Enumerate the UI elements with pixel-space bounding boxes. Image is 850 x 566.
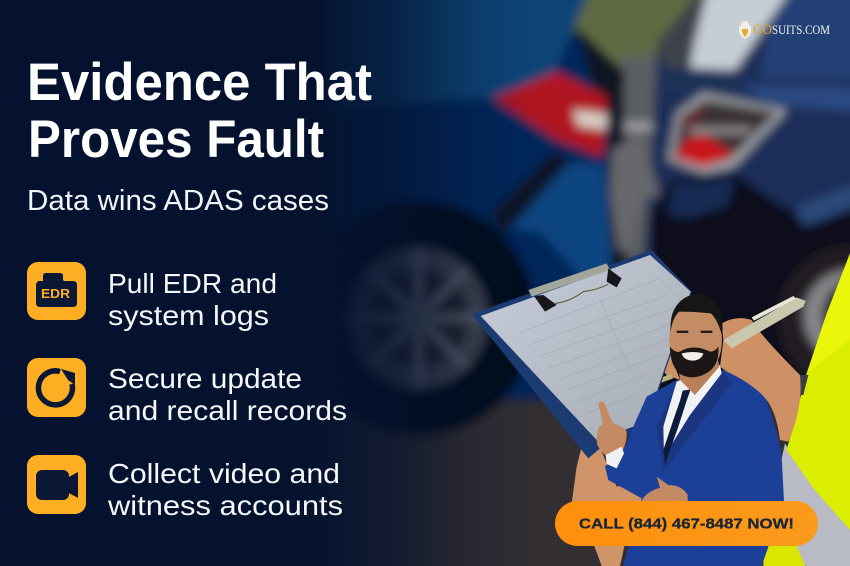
road between the cars: [612, 55, 662, 260]
icon: refresh arrow: [27, 358, 86, 417]
neck: [678, 355, 719, 395]
beard: [670, 347, 718, 377]
windshield: [690, 0, 790, 70]
list item: video and witness: Collect video and: [108, 458, 340, 489]
ground: [300, 400, 850, 566]
icon: EDR recorder: EDR: [41, 286, 71, 301]
logo: SUITS.COM: [772, 23, 830, 37]
call to action button: [555, 501, 818, 546]
icon: video camera: [27, 455, 86, 514]
hand under clipboard: [572, 428, 647, 566]
list item: update records: [27, 358, 347, 426]
eyes: [677, 331, 712, 333]
officer hand holding pen: [660, 318, 801, 442]
list item: update records: Secure update: [108, 363, 302, 394]
right car body: [640, 0, 850, 300]
right tail light: [668, 93, 787, 173]
left car dark gap: [575, 25, 625, 120]
lower hand: [642, 477, 688, 501]
right car lower dark panel: [650, 173, 850, 400]
photo cutout: clipboard, officer, lawyer: [472, 250, 850, 566]
icon: EDR recorder: [27, 262, 86, 320]
grass behind the cars: [570, 0, 720, 70]
title: Evidence That: [27, 53, 372, 112]
head: [669, 303, 722, 374]
list item: video and witness: [27, 455, 343, 521]
left car body: [330, 0, 623, 410]
hair: [670, 294, 723, 337]
shirt: [663, 365, 722, 457]
left tail light: [493, 72, 607, 157]
list item: EDR: Pull EDR and: [108, 268, 277, 299]
list item: video and witness: witness accounts: [107, 490, 343, 521]
officer vest and sleeve: [762, 253, 850, 566]
lawyer: [597, 294, 784, 566]
right wheel: [778, 246, 850, 390]
call to action button: CALL (844) 467-8487 NOW!: [579, 516, 794, 532]
logo: [739, 21, 830, 39]
left wheel: [300, 200, 536, 436]
title: Proves Fault: [28, 110, 324, 169]
damaged bumper: [610, 135, 660, 250]
tie: [663, 389, 691, 464]
pen: [643, 296, 806, 389]
list item: update records: and recall records: [108, 395, 347, 426]
pointing hand: [597, 401, 627, 460]
list item: EDR: system logs: [108, 300, 269, 331]
subtitle: Data wins ADAS cases: [27, 185, 329, 217]
logo: GO: [753, 22, 772, 38]
list item: EDR: [27, 262, 277, 331]
clipboard: [472, 250, 692, 458]
suit: [605, 370, 784, 566]
title: [27, 53, 372, 169]
smile: [682, 352, 703, 361]
